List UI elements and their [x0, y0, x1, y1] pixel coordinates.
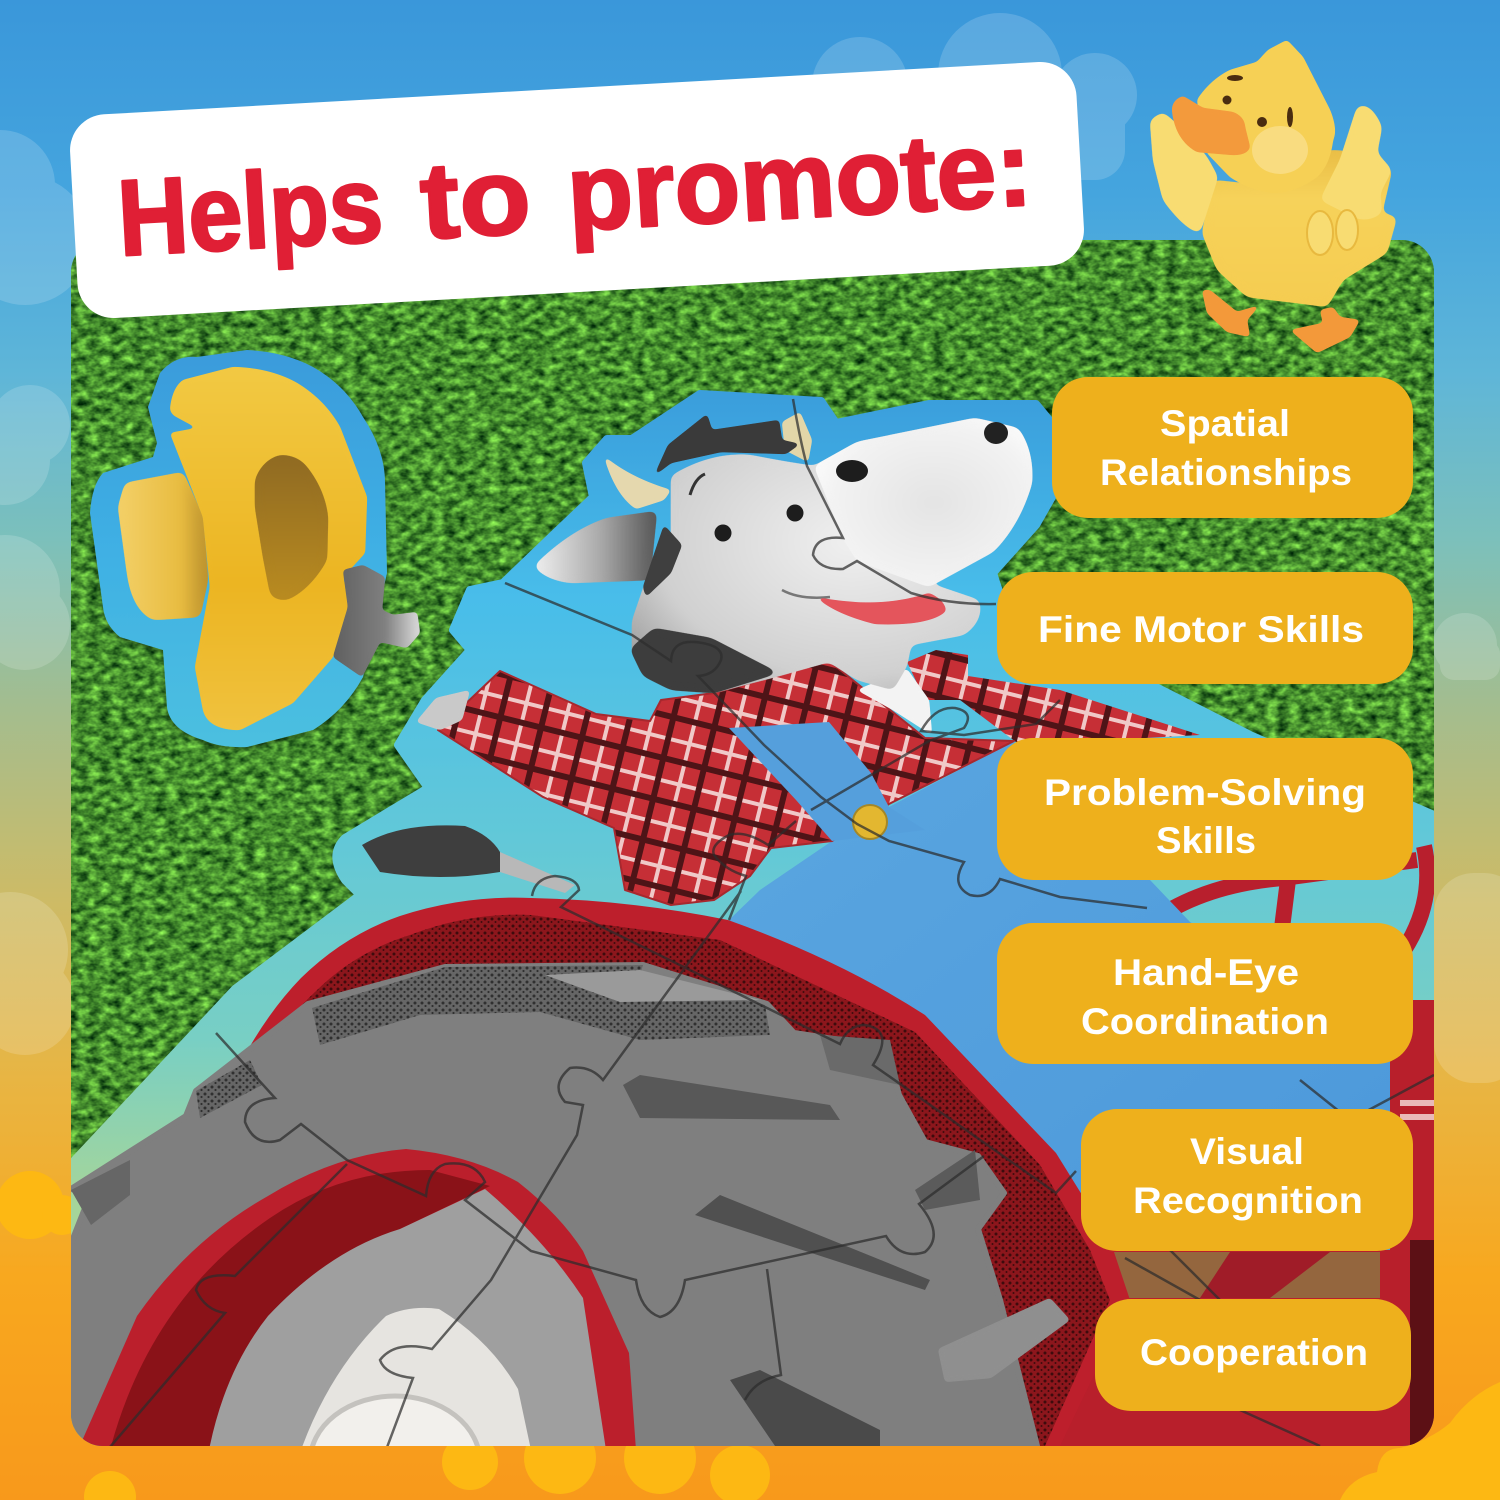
- hat crown opening: [255, 455, 328, 600]
- cow: [534, 412, 1032, 693]
- skill: Visual Recognition: Recognition: [1133, 1180, 1363, 1221]
- eyes: [714, 524, 732, 542]
- title text: promote:: [564, 107, 1035, 253]
- duck right wing: [1307, 106, 1392, 255]
- skill: Visual Recognition: Visual: [1190, 1131, 1304, 1172]
- wheel hub: [209, 1189, 606, 1450]
- raised shirt collar: [907, 650, 968, 700]
- puzzle cut lines: [110, 399, 1434, 1450]
- skill: Cooperation: [1095, 1299, 1411, 1411]
- duck left wing: [1150, 112, 1218, 233]
- skill: Fine Motor Skills: [997, 572, 1413, 684]
- title text: to: [417, 135, 534, 262]
- cow muzzle: [630, 628, 779, 693]
- eyebrow: [690, 474, 705, 495]
- tractor red body: [1043, 1000, 1434, 1446]
- skill: Hand-Eye Coordination: Hand-Eye: [1113, 952, 1299, 993]
- duck body: [1202, 150, 1397, 307]
- tractor steering wheel: [1147, 846, 1427, 950]
- cow hand: [416, 690, 470, 730]
- duck cheek: [1252, 126, 1308, 174]
- farmer overalls: [728, 741, 1400, 1260]
- hat crown: [118, 472, 208, 620]
- plaid shirt: [438, 661, 1014, 905]
- cow face: [632, 418, 1032, 693]
- wheel rim: [78, 1149, 636, 1450]
- title banner: [68, 60, 1086, 320]
- hat brim: [170, 367, 367, 730]
- smile line: [782, 590, 830, 598]
- fender inner stipple: [262, 915, 1110, 1446]
- dark edge: [1410, 1240, 1434, 1446]
- tire tread marks: [71, 965, 980, 1446]
- stripes: [1400, 1100, 1434, 1106]
- skill: Problem-Solving Skills: Problem-Solving: [1044, 772, 1366, 813]
- skill: Problem-Solving Skills: Skills: [1156, 820, 1256, 861]
- cow snout: [814, 418, 1032, 587]
- title text: [114, 107, 1035, 279]
- tail: [362, 825, 575, 893]
- puzzle piece: sky backing: [71, 394, 1434, 1446]
- skill: Cooperation: Cooperation: [1140, 1332, 1368, 1373]
- title text: Helps: [114, 143, 386, 279]
- yellow foreground clouds: [0, 1171, 1500, 1500]
- skill: Hand-Eye Coordination: Coordination: [1081, 1001, 1329, 1042]
- grey puzzle tab: [333, 565, 420, 677]
- right sleeve: [960, 676, 1200, 745]
- wheel rim dark band: [110, 1170, 490, 1450]
- cow hair: [656, 416, 797, 472]
- tractor seat: [1110, 1252, 1380, 1298]
- grey axle bolt: [938, 1298, 1070, 1382]
- duck mascot: [1150, 40, 1397, 353]
- skill: Spatial Relationships: [1052, 377, 1413, 518]
- skill: Hand-Eye Coordination: [997, 923, 1413, 1064]
- cow ear: [534, 511, 657, 583]
- background clouds: [0, 13, 1500, 1083]
- overall button: [853, 805, 887, 839]
- duck left foot: [1202, 290, 1260, 337]
- cow far horn: [782, 412, 812, 462]
- skill: Problem-Solving Skills: [997, 738, 1413, 880]
- duck eyes and brows: [1222, 75, 1293, 127]
- tongue: [816, 593, 946, 624]
- hub inner ring: [310, 1396, 480, 1500]
- puzzle piece: hat: [90, 350, 420, 747]
- skill: Spatial Relationships: Spatial: [1160, 403, 1290, 444]
- hat backing: [90, 350, 387, 747]
- tractor fender: [250, 898, 1130, 1298]
- duck head: [1197, 40, 1335, 193]
- hub white disc: [301, 1308, 531, 1450]
- duck right foot: [1290, 307, 1360, 353]
- cow near horn: [606, 459, 670, 508]
- cow spot: [643, 525, 682, 597]
- skill: Visual Recognition: [1081, 1109, 1413, 1251]
- skill: Spatial Relationships: Relationships: [1100, 452, 1352, 493]
- skill: Fine Motor Skills: Fine Motor Skills: [1038, 609, 1364, 650]
- overall strap: [729, 722, 889, 841]
- tractor tire: [71, 965, 1037, 1446]
- grass background: [71, 240, 1434, 1446]
- duck bill: [1172, 96, 1250, 155]
- white undershirt: [857, 669, 932, 735]
- panel: puzzle photo on grass: [71, 240, 1434, 1500]
